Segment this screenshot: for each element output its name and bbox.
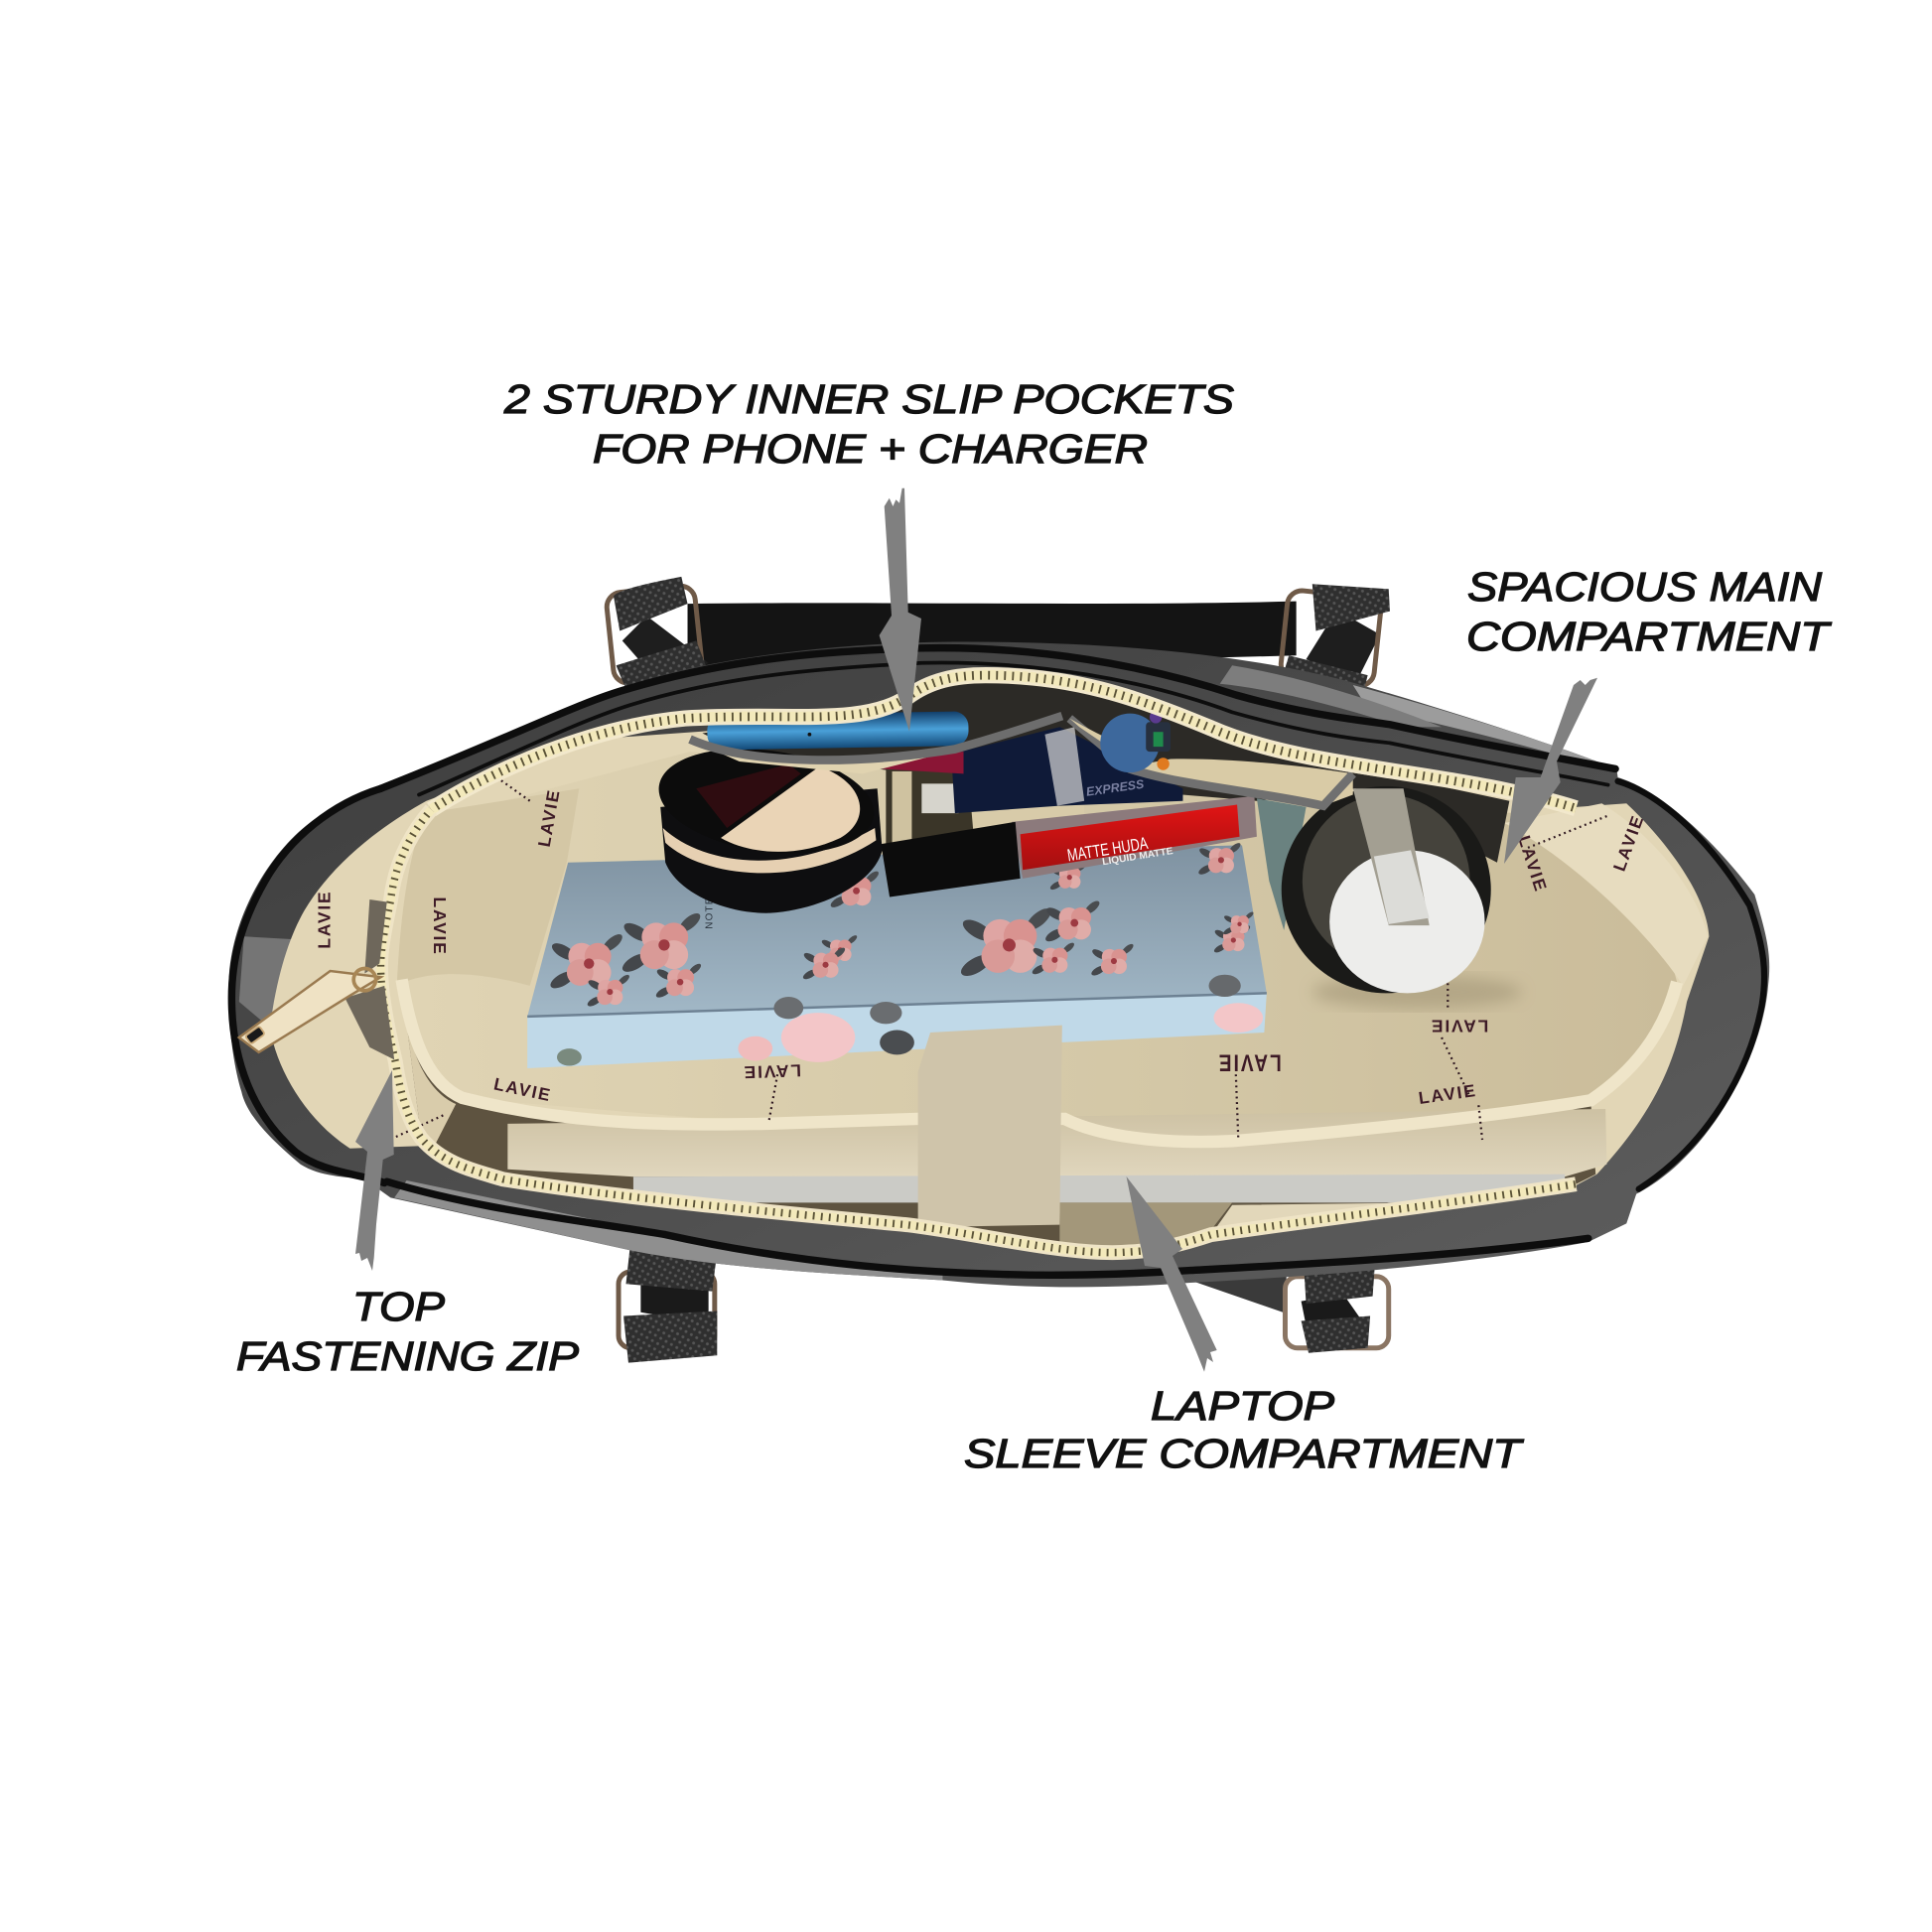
gloss tube <box>1012 796 1257 879</box>
dark upper interior under zipper <box>702 680 1509 863</box>
label: top fastening zip <box>236 1284 580 1379</box>
LAVIE lining prints <box>315 770 1648 1146</box>
label: top fastening zip: TOP <box>352 1284 446 1329</box>
label: laptop sleeve: SLEEVE COMPARTMENT <box>964 1431 1524 1476</box>
bag photo illustration <box>228 577 1769 1363</box>
label: main compartment: COMPARTMENT <box>1466 614 1832 659</box>
left pocket lining <box>709 740 998 773</box>
LAVIE lining prints: LAVIE <box>1418 1080 1478 1108</box>
red lip gloss <box>881 796 1257 897</box>
zipper tape lower <box>345 986 394 1059</box>
top zipper <box>431 675 1576 809</box>
phone <box>707 711 969 751</box>
LAVIE lining prints: LAVIE <box>742 1060 801 1082</box>
top-right light leather band <box>1353 685 1616 768</box>
laptop sleeve compartment <box>402 986 1606 1252</box>
bottle body <box>1282 786 1491 993</box>
dark red lipstick <box>863 752 964 773</box>
arrow: main compartment <box>1504 678 1597 864</box>
compact cream centre <box>721 766 860 852</box>
bottle cap <box>1329 850 1485 993</box>
bottom-left light leather band <box>394 1180 942 1281</box>
laptop lid <box>507 1109 1606 1176</box>
label: laptop sleeve: LAPTOP <box>1151 1383 1335 1429</box>
label: main compartment: SPACIOUS MAIN <box>1467 564 1822 610</box>
label: inner slip pockets: FOR PHONE + CHARGER <box>593 426 1148 472</box>
arrow: inner slip pockets <box>880 488 921 732</box>
piping trim <box>231 648 1764 1275</box>
leather outer shell <box>228 642 1769 1287</box>
shadow beside bottle <box>1312 975 1522 1009</box>
LAVIE lining prints: LAVIE <box>430 897 450 956</box>
inner slip pockets <box>690 711 1353 806</box>
notes label: NOTES <box>704 889 715 929</box>
label: main compartment <box>1466 564 1832 659</box>
LAVIE lining prints: LAVIE <box>1514 833 1552 895</box>
LAVIE lining prints: LAVIE <box>1609 812 1648 874</box>
notebook cover <box>527 845 1267 1017</box>
left pocket edge <box>690 716 1062 760</box>
right wall lining <box>1504 803 1708 986</box>
label: inner slip pockets: 2 STURDY INNER SLIP POCKETS <box>503 376 1234 422</box>
laptop silver edge <box>633 1174 1565 1202</box>
compact red wedge <box>696 763 801 828</box>
bottle strap <box>1353 788 1430 925</box>
top handle <box>688 602 1297 671</box>
LAVIE lining prints: LAVIE <box>1217 1049 1282 1077</box>
gloss cap <box>881 822 1021 897</box>
LAVIE lining prints: LAVIE <box>492 1073 554 1105</box>
compact body <box>660 788 883 913</box>
main compartment floor <box>402 752 1677 1141</box>
cover flowers <box>548 841 1255 1009</box>
metal jar <box>886 768 1084 850</box>
arrow: top zip <box>355 1070 394 1271</box>
top-left strap and ring <box>606 577 710 695</box>
zipper tape <box>364 899 387 973</box>
water bottle <box>1282 786 1491 993</box>
edge flowers <box>557 975 1263 1066</box>
bottom-right strap and ring <box>1186 1262 1389 1353</box>
top-right strap and ring <box>1280 584 1390 700</box>
LAVIE lining prints: LAVIE <box>315 891 335 949</box>
navy bottle <box>951 727 1182 813</box>
label: inner slip pockets <box>503 376 1234 472</box>
label: top fastening zip: FASTENING ZIP <box>236 1333 580 1379</box>
mesh pocket <box>1257 798 1307 930</box>
compact lid <box>652 736 881 866</box>
gloss colour <box>1021 804 1240 870</box>
LAVIE lining prints: LAVIE <box>1430 1017 1488 1036</box>
arrow: laptop sleeve <box>1126 1176 1217 1372</box>
elastic strap <box>918 1026 1062 1227</box>
LAVIE lining prints: LAVIE <box>534 787 564 849</box>
navy bottle: EXPRESS <box>1085 777 1146 799</box>
side and bottom zipper <box>380 809 1576 1253</box>
zip pull <box>239 969 380 1052</box>
bottom-left strap and ring <box>619 1240 717 1363</box>
right slip pocket <box>1130 759 1353 806</box>
lining interior <box>270 727 1709 1253</box>
left wall shadow <box>397 788 579 986</box>
gloss label: MATTE HUDA <box>1066 833 1150 865</box>
pocket lip <box>402 980 1677 1142</box>
blue figure topper <box>1100 711 1171 772</box>
label: laptop sleeve <box>964 1383 1524 1476</box>
top leather band <box>1220 665 1442 727</box>
compact powder <box>652 736 883 913</box>
red lip gloss: LIQUID MATTE <box>1102 846 1174 868</box>
floral notebook <box>527 841 1267 1068</box>
notebook edge <box>527 993 1267 1068</box>
side tab leather <box>239 936 331 1028</box>
